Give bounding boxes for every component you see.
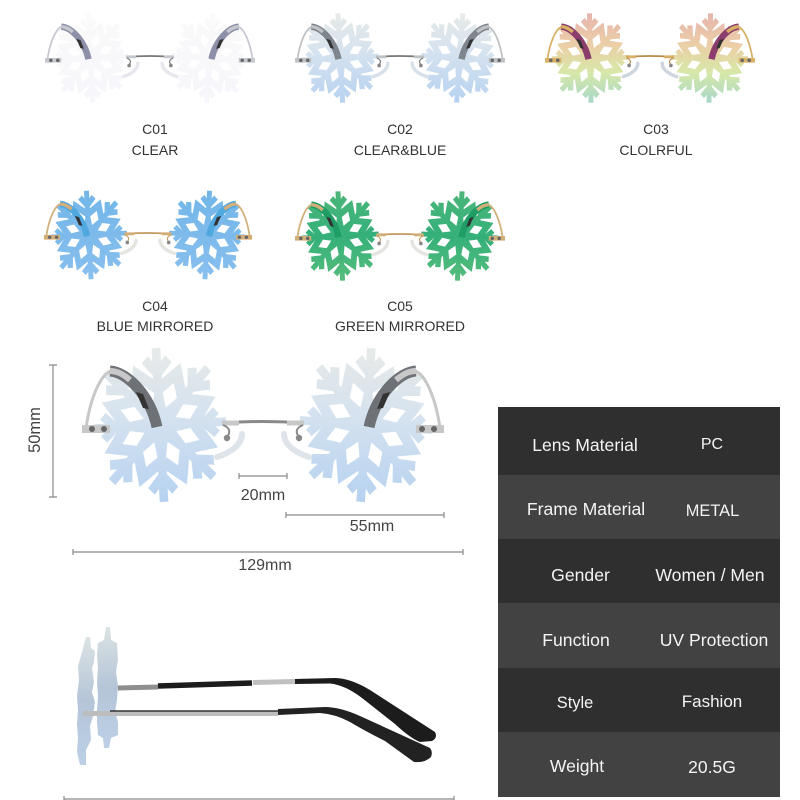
product variant: C01 clear glasses — [45, 24, 255, 102]
row: lens material: PC — [701, 436, 723, 453]
specification table — [498, 407, 780, 797]
row: function: Function — [542, 630, 610, 650]
dimension: bridge 20mm: 20mm — [241, 487, 285, 504]
row: weight — [550, 756, 736, 777]
product variant: C03 colorful glasses — [545, 13, 755, 103]
row: lens material: Lens Material — [532, 435, 638, 455]
row: style — [557, 692, 742, 712]
row: weight: Weight — [550, 756, 604, 776]
side view: front lens — [97, 627, 118, 748]
label: C03 CLOLRFUL: CLOLRFUL — [619, 142, 693, 158]
dimension: lens height 50mm — [26, 365, 57, 497]
dimension: lens height 50mm: 50mm — [26, 407, 44, 453]
label: C02 CLEAR&BLUE — [354, 121, 446, 158]
label: C05 GREEN MIRRORED: C05 — [387, 298, 413, 314]
row: frame material — [527, 499, 739, 520]
row: gender: Gender — [551, 565, 610, 585]
dimension: total width 129mm: 129mm — [238, 557, 292, 574]
dimension: lens width 55mm — [286, 512, 444, 535]
side view of glasses — [77, 627, 436, 765]
label: C03 CLOLRFUL — [619, 121, 693, 158]
product variant: C04 blue mirrored glasses — [44, 190, 252, 280]
row: gender — [551, 565, 765, 585]
front view glasses, large — [82, 348, 444, 502]
side view: back lens — [77, 637, 95, 765]
label: C01 CLEAR: C01 — [142, 121, 168, 137]
row: function: UV Protection — [660, 630, 768, 650]
label: C01 CLEAR — [132, 121, 178, 158]
label: C02 CLEAR&BLUE: C02 — [387, 121, 413, 137]
label: C02 CLEAR&BLUE: CLEAR&BLUE — [354, 142, 446, 158]
label: C03 CLOLRFUL: C03 — [643, 121, 669, 137]
label: C05 GREEN MIRRORED — [335, 298, 465, 334]
row: style: Style — [557, 694, 593, 712]
label: C04 BLUE MIRRORED — [97, 298, 213, 334]
row: function — [542, 630, 768, 650]
label: C04 BLUE MIRRORED: C04 — [142, 298, 168, 314]
side view: upper temple arm — [118, 678, 436, 742]
row: frame material: Frame Material — [527, 499, 645, 519]
product variant: C02 clear and blue glasses — [295, 13, 505, 103]
side view: lower temple arm — [83, 707, 432, 762]
dimension: temple length — [64, 796, 454, 800]
row: lens material — [532, 435, 723, 455]
product variant: C05 green mirrored glasses — [295, 191, 505, 281]
row: frame material: METAL — [686, 502, 739, 520]
dimension: bridge 20mm — [239, 473, 287, 504]
dimension: total width 129mm — [73, 549, 463, 574]
dimension: lens width 55mm: 55mm — [350, 518, 394, 535]
row: style: Fashion — [682, 692, 742, 711]
label: C05 GREEN MIRRORED: GREEN MIRRORED — [335, 318, 465, 334]
label: C04 BLUE MIRRORED: BLUE MIRRORED — [97, 318, 213, 334]
row: weight: 20.5G — [688, 757, 736, 777]
label: C01 CLEAR: CLEAR — [132, 142, 178, 158]
row: gender: Women / Men — [655, 565, 765, 585]
